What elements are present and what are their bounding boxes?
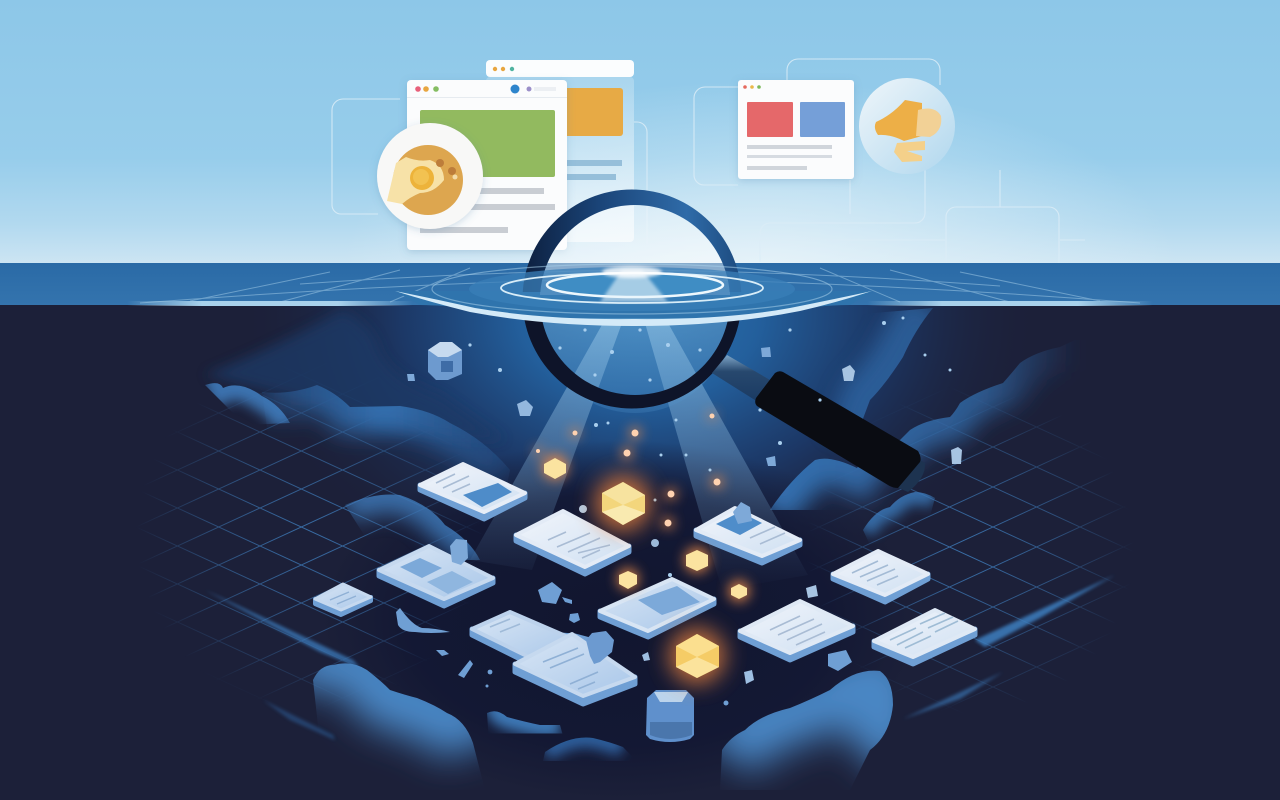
water surface band	[0, 263, 1280, 306]
card 3	[696, 502, 800, 563]
lens above water	[540, 200, 730, 295]
scattered particles	[468, 316, 952, 577]
icon: megaphone badge	[859, 78, 955, 174]
left mid cloud	[345, 494, 480, 560]
card 5	[315, 584, 371, 615]
background window outlines	[332, 59, 1085, 277]
card 1	[420, 464, 525, 519]
handle neck	[712, 355, 770, 402]
lower cube	[676, 634, 719, 678]
rim upper arc	[522, 190, 741, 292]
large halos	[595, 475, 725, 684]
floor ridges	[205, 575, 1115, 740]
left dark upper cloud	[205, 310, 505, 440]
foreground left cloud	[318, 667, 473, 748]
sky background	[0, 0, 1280, 264]
left floor grid	[146, 388, 474, 694]
left back cloud	[262, 385, 510, 470]
waterline highlight	[100, 291, 1180, 326]
rim lower arc	[524, 320, 740, 408]
browser window: rear orange	[486, 60, 634, 242]
right rear cloud	[855, 308, 933, 440]
document cards	[315, 464, 975, 704]
card 8	[740, 601, 853, 660]
left front cloud lobe	[205, 383, 290, 423]
small cubes	[544, 458, 747, 599]
lens below water	[540, 318, 730, 413]
small rubble pieces	[396, 505, 852, 706]
card 4	[379, 539, 493, 606]
card 10	[472, 612, 590, 664]
foreground middle clouds	[487, 711, 623, 752]
ember dots	[536, 414, 720, 526]
handle cap	[892, 452, 925, 492]
browser window: green	[407, 80, 567, 250]
card 2	[516, 511, 629, 574]
card 6	[833, 551, 928, 602]
glowing golden cubes	[534, 412, 750, 684]
ripple bowl	[469, 267, 795, 311]
ripple rings	[432, 264, 832, 314]
light cone at surface	[600, 270, 668, 302]
small halos	[534, 412, 750, 602]
deep water background	[0, 305, 1280, 800]
browser window: red and blue	[738, 80, 854, 179]
magnifying glass	[522, 189, 925, 492]
large lantern block	[428, 342, 462, 380]
water lip below surface	[395, 291, 872, 326]
card 9	[874, 610, 975, 664]
card 7	[600, 579, 714, 637]
floating debris cubes	[407, 342, 962, 466]
small cubes	[407, 347, 962, 466]
right floor grid	[816, 395, 1126, 704]
right rock cloud	[770, 340, 1075, 510]
surface ripples	[432, 264, 832, 314]
surface grid lines	[140, 268, 1140, 303]
surface glow	[602, 266, 662, 278]
large cube	[602, 482, 645, 525]
icon: cylinder artifact	[646, 690, 694, 742]
handle grip	[755, 371, 921, 488]
right lower cloud	[863, 492, 935, 530]
underwater dark pool	[300, 440, 940, 800]
card 11	[515, 631, 635, 704]
icon: egg badge	[377, 123, 483, 229]
light beams from lens	[470, 323, 808, 590]
foreground right cloud	[726, 678, 888, 755]
deep water blue haze	[180, 305, 1100, 680]
